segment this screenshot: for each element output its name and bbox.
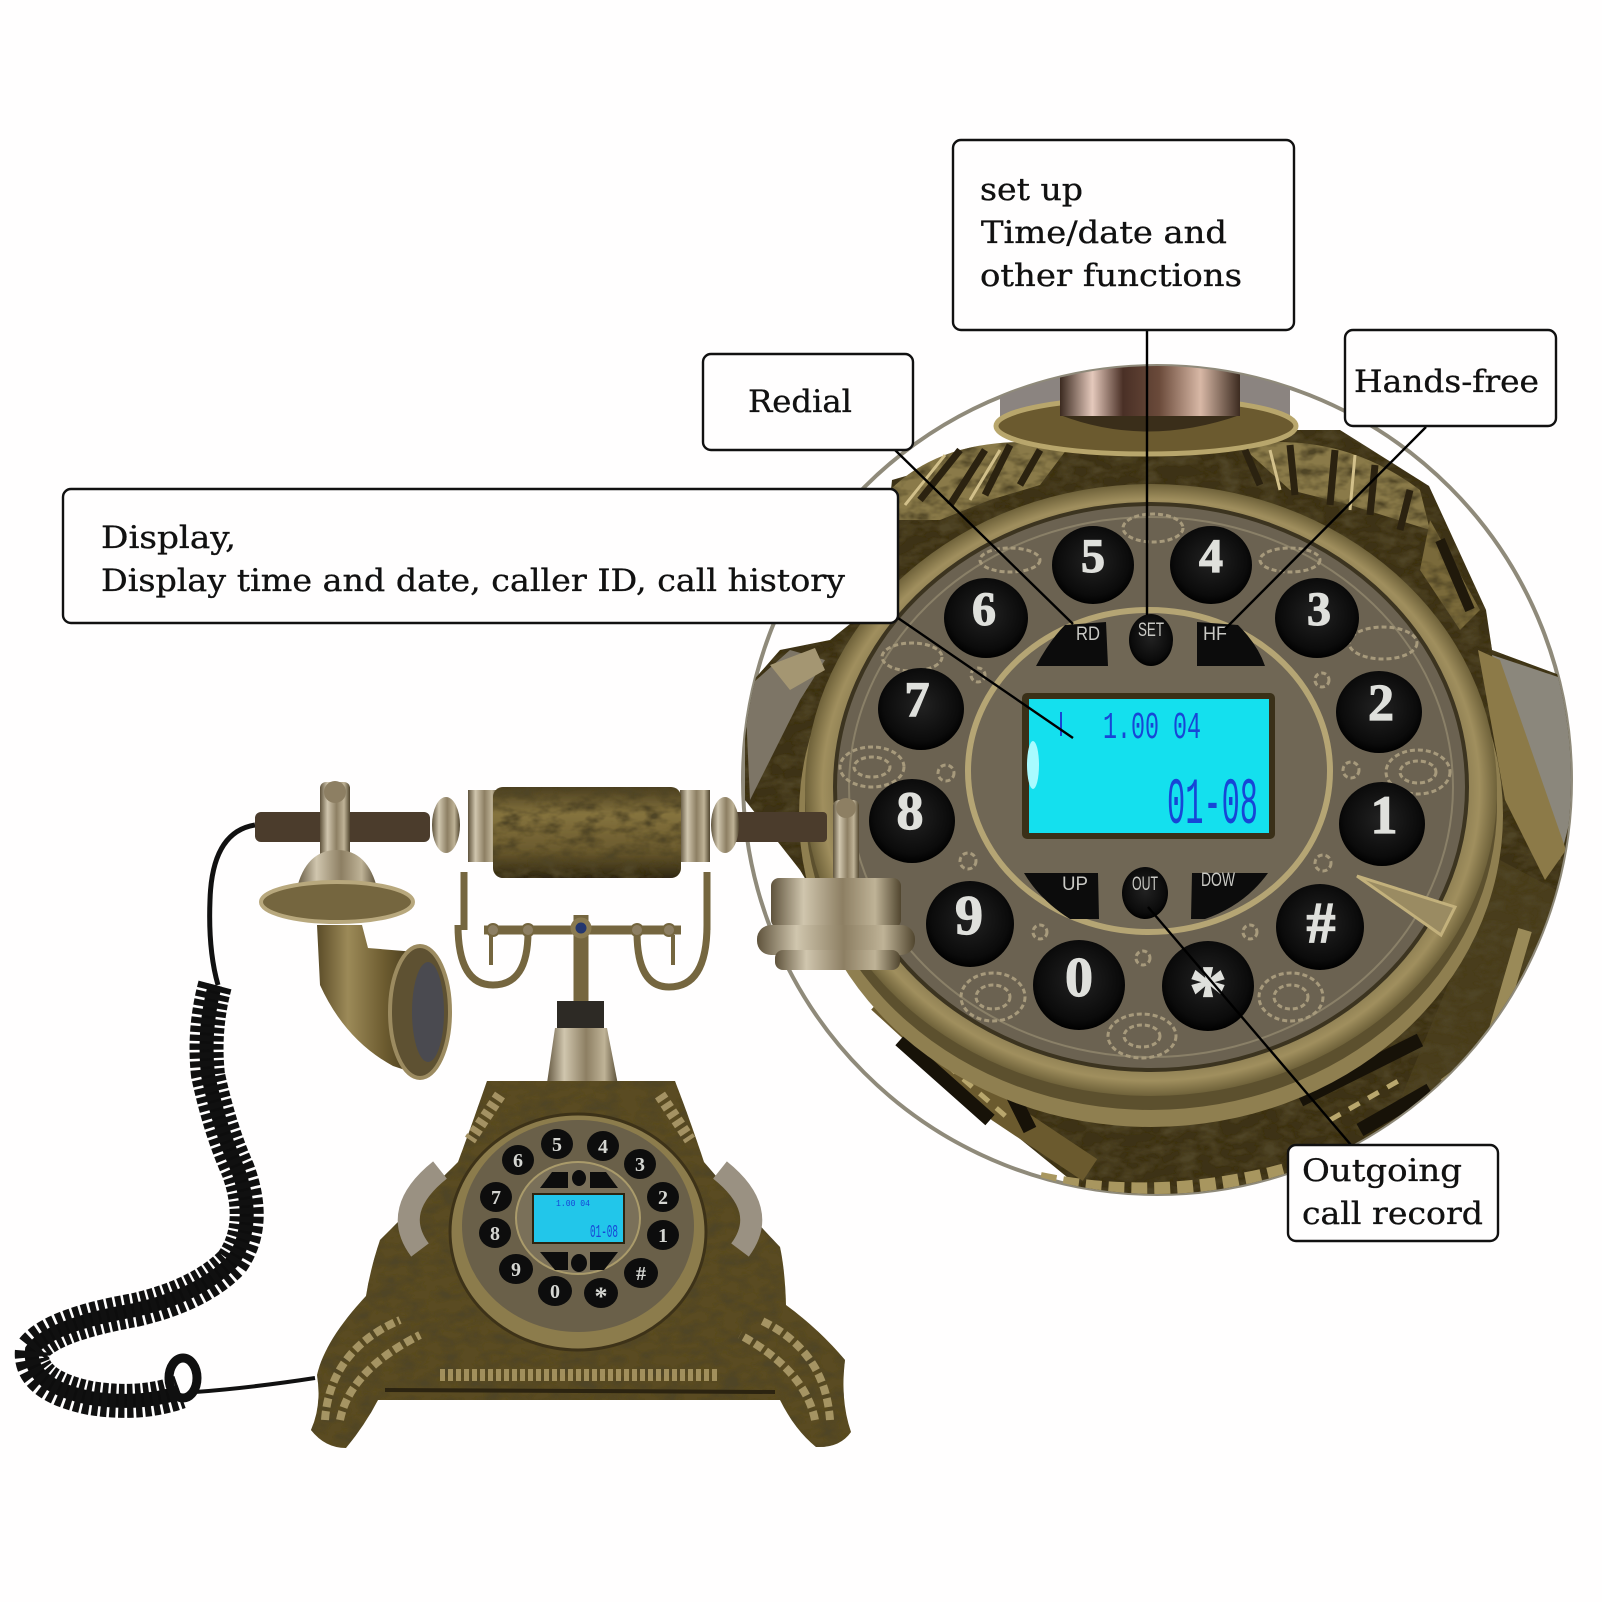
small dial: 6 <box>513 1150 523 1172</box>
small dial: 7 <box>491 1187 501 1209</box>
small dial: 1.00 04 <box>556 1199 590 1209</box>
magnified keypad circle <box>743 360 1600 1250</box>
callout: outgoing call record: Outgoing <box>1302 1153 1462 1189</box>
base ornaments <box>325 1095 830 1420</box>
number keys: 7 <box>904 671 930 727</box>
leader lines <box>895 330 1426 1145</box>
number keys: 6 <box>972 583 996 636</box>
cradle neck <box>546 1001 619 1090</box>
function buttons: DOW <box>1201 870 1235 891</box>
small dial: 9 <box>511 1259 521 1281</box>
callout: set up <box>953 140 1294 330</box>
cradle <box>458 872 707 1005</box>
number keys: 2 <box>1368 675 1394 732</box>
callout: display: Display, <box>101 520 236 556</box>
dial plate <box>805 484 1497 1096</box>
number keys: 5 <box>1081 530 1105 583</box>
phone infographic <box>14 138 1573 1448</box>
callout: outgoing call record: call record <box>1302 1196 1483 1232</box>
body of magnified phone <box>745 430 1600 1250</box>
callout: redial <box>703 354 913 450</box>
small dial: 01-08 <box>590 1223 618 1243</box>
number keys <box>869 526 1425 1035</box>
number keys: 4 <box>1199 530 1223 583</box>
small dial: 2 <box>658 1187 668 1209</box>
small dial: 5 <box>552 1134 562 1156</box>
LCD display <box>1022 693 1275 843</box>
small dial: 3 <box>635 1154 645 1176</box>
LCD display: 01-08 <box>1167 768 1258 843</box>
number keys: # <box>1306 890 1336 955</box>
function buttons: RD <box>1076 624 1100 645</box>
curly phone cord <box>32 825 315 1401</box>
function buttons: UP <box>1062 874 1088 895</box>
function buttons: OUT <box>1132 874 1158 895</box>
number keys: 8 <box>896 781 924 841</box>
callout: display <box>63 489 898 623</box>
callout: outgoing call record <box>1288 1145 1498 1241</box>
function buttons: HF <box>1203 624 1227 645</box>
LCD display: 1.00 04 <box>1103 707 1201 750</box>
callout: hands-free <box>1345 330 1556 426</box>
callout: redial: Redial <box>748 384 852 420</box>
callout: hands-free: Hands-free <box>1354 364 1539 400</box>
small dial: 8 <box>490 1223 500 1245</box>
small dial: # <box>636 1263 646 1285</box>
number keys: 1 <box>1370 785 1398 845</box>
handset <box>255 781 915 970</box>
small dial: * <box>594 1282 608 1311</box>
number keys: * <box>1189 951 1227 1035</box>
callout: set up: other functions <box>980 258 1242 294</box>
neck and tube <box>996 360 1296 454</box>
dial rim <box>799 503 1503 1127</box>
small telephone <box>255 781 915 1448</box>
function buttons <box>1024 614 1268 919</box>
callout: display: Display time and date, caller ID, call history <box>101 563 846 599</box>
pointer wedge <box>1357 876 1455 935</box>
small dial <box>450 1114 706 1350</box>
base body <box>311 1081 851 1448</box>
number keys: 0 <box>1065 947 1093 1009</box>
small dial: 4 <box>598 1136 608 1158</box>
decorative knots <box>840 514 1450 1058</box>
small dial: 1 <box>658 1225 668 1247</box>
function buttons: SET <box>1138 620 1164 641</box>
callout: set up: set up <box>980 172 1083 208</box>
callout: set up: Time/date and <box>981 215 1227 251</box>
number keys: 3 <box>1307 583 1331 636</box>
number keys: 9 <box>955 885 983 947</box>
earpiece <box>261 850 450 1078</box>
ornamental leaves <box>905 445 1470 610</box>
small dial: 0 <box>550 1281 560 1303</box>
